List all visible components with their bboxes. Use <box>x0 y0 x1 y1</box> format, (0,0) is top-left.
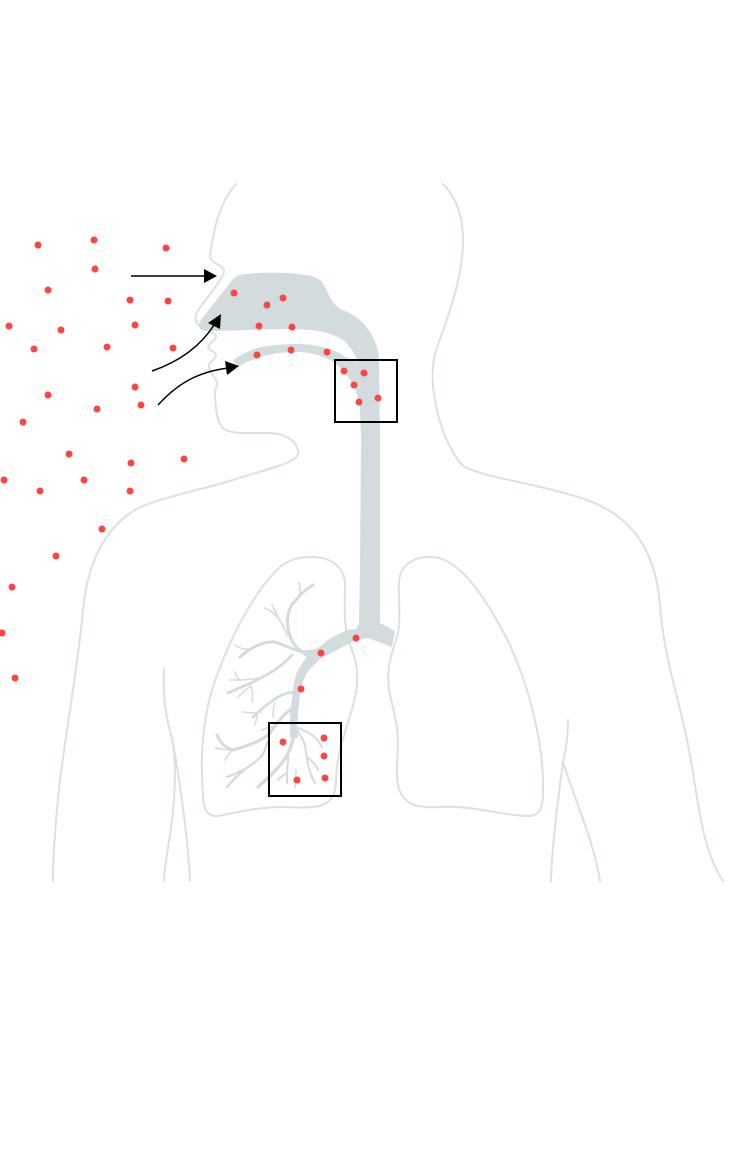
red particles <box>0 236 382 784</box>
callout box: upper airway <box>335 360 397 422</box>
arrow: air entering the mouth <box>158 361 239 405</box>
callout box: lower airway <box>269 723 341 796</box>
right lung outline <box>388 557 543 816</box>
airway: nasal cavity, throat, trachea and main bronchi <box>199 273 395 738</box>
arrow: air entering the nose <box>131 269 217 283</box>
arrow: air entering the nasal cavity <box>152 314 221 371</box>
left lung outline <box>202 557 357 816</box>
body outline <box>53 184 723 881</box>
airway: bronchial tree <box>215 583 322 788</box>
